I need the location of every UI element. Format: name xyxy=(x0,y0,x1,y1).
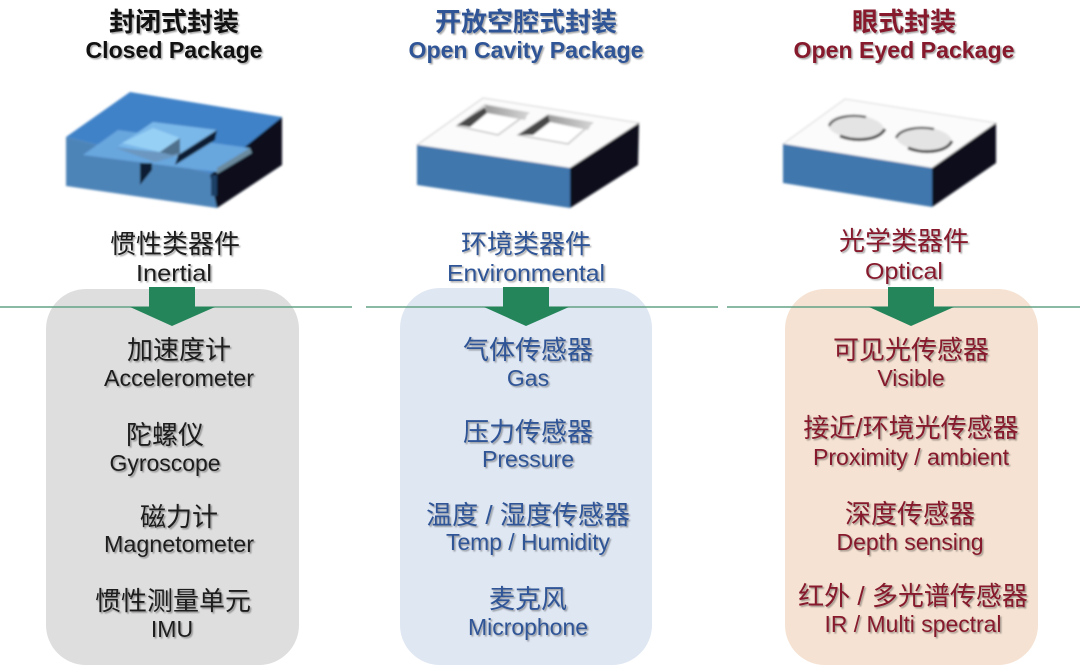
category: environmental: 环境类器件 xyxy=(461,229,591,259)
item: accelerometer xyxy=(104,335,254,391)
item: pressure: 压力传感器 xyxy=(463,417,593,447)
list: inertial sensors xyxy=(95,335,254,642)
arrow: inertial xyxy=(130,287,215,326)
list: environmental sensors xyxy=(426,335,630,640)
item: proximity and ambient xyxy=(803,413,1019,470)
heading: open cavity package: Open Cavity Package xyxy=(408,37,644,63)
lens: left xyxy=(827,112,885,142)
item: gyroscope: 陀螺仪 xyxy=(126,420,204,450)
item: visible: Visible xyxy=(877,365,945,391)
category: inertial: 惯性类器件 xyxy=(110,229,240,259)
item: depth sensing: Depth sensing xyxy=(836,529,984,555)
list: optical sensors xyxy=(798,335,1028,637)
item: gyroscope: Gyroscope xyxy=(110,450,220,476)
item: microphone: 麦克风 xyxy=(489,584,567,614)
heading: closed package: Closed Package xyxy=(86,37,262,63)
arrow: optical xyxy=(869,287,954,326)
item: magnetometer: Magnetometer xyxy=(104,531,254,557)
category: inertial xyxy=(110,229,240,286)
heading: open eyed package: 眼式封装 xyxy=(852,7,956,37)
cavity: left xyxy=(457,105,528,135)
item: pressure: Pressure xyxy=(482,446,574,472)
category: inertial: Inertial xyxy=(136,260,212,286)
category: environmental xyxy=(447,229,605,286)
item: magnetometer: 磁力计 xyxy=(140,502,218,532)
item: gas: Gas xyxy=(507,365,549,391)
item: IR and multispectral xyxy=(798,581,1028,637)
panel: optical background xyxy=(785,289,1038,665)
item: proximity and ambient: 接近/环境光传感器 xyxy=(803,413,1019,443)
item: visible: 可见光传感器 xyxy=(833,335,989,365)
heading: open cavity package: 开放空腔式封装 xyxy=(435,7,617,37)
item: IMU: 惯性测量单元 xyxy=(95,586,251,616)
item: accelerometer: 加速度计 xyxy=(127,335,231,365)
item: temperature and humidity: Temp / Humidity xyxy=(446,529,610,555)
icon: open cavity package cube xyxy=(417,98,639,208)
item: microphone xyxy=(468,584,588,640)
item: magnetometer xyxy=(104,502,254,557)
icon: closed package cube xyxy=(66,92,282,208)
panel: environmental background xyxy=(400,288,652,665)
category: optical xyxy=(839,226,969,284)
heading: open eyed package xyxy=(794,7,1014,63)
heading: closed package: 封闭式封装 xyxy=(109,7,239,37)
item: IR and multispectral: IR / Multi spectral xyxy=(824,611,1002,637)
item: IMU xyxy=(95,586,251,642)
cavity: right xyxy=(518,115,592,144)
item: IR and multispectral: 红外 / 多光谱传感器 xyxy=(798,581,1028,611)
item: IMU: IMU xyxy=(151,616,193,642)
item: accelerometer: Accelerometer xyxy=(104,365,254,391)
item: gyroscope xyxy=(110,420,220,476)
lens: right xyxy=(895,124,953,154)
heading: closed package xyxy=(86,7,262,63)
category: optical: 光学类器件 xyxy=(839,226,969,256)
item: depth sensing xyxy=(836,499,984,555)
category: environmental: Environmental xyxy=(447,260,605,286)
panel: inertial background xyxy=(46,289,299,665)
item: microphone: Microphone xyxy=(468,614,588,640)
item: gas xyxy=(463,335,593,391)
item: temperature and humidity: 温度 / 湿度传感器 xyxy=(426,500,630,530)
heading: open eyed package: Open Eyed Package xyxy=(794,37,1014,63)
item: temperature and humidity xyxy=(426,500,630,555)
item: gas: 气体传感器 xyxy=(463,335,593,365)
item: pressure xyxy=(463,417,593,472)
item: depth sensing: 深度传感器 xyxy=(845,499,975,529)
icon: open eyed package cube xyxy=(783,99,996,207)
category: optical: Optical xyxy=(865,258,943,284)
item: proximity and ambient: Proximity / ambient xyxy=(813,444,1010,470)
arrow: environmental xyxy=(484,287,569,326)
heading: open cavity package xyxy=(408,7,644,63)
item: visible xyxy=(833,335,989,391)
